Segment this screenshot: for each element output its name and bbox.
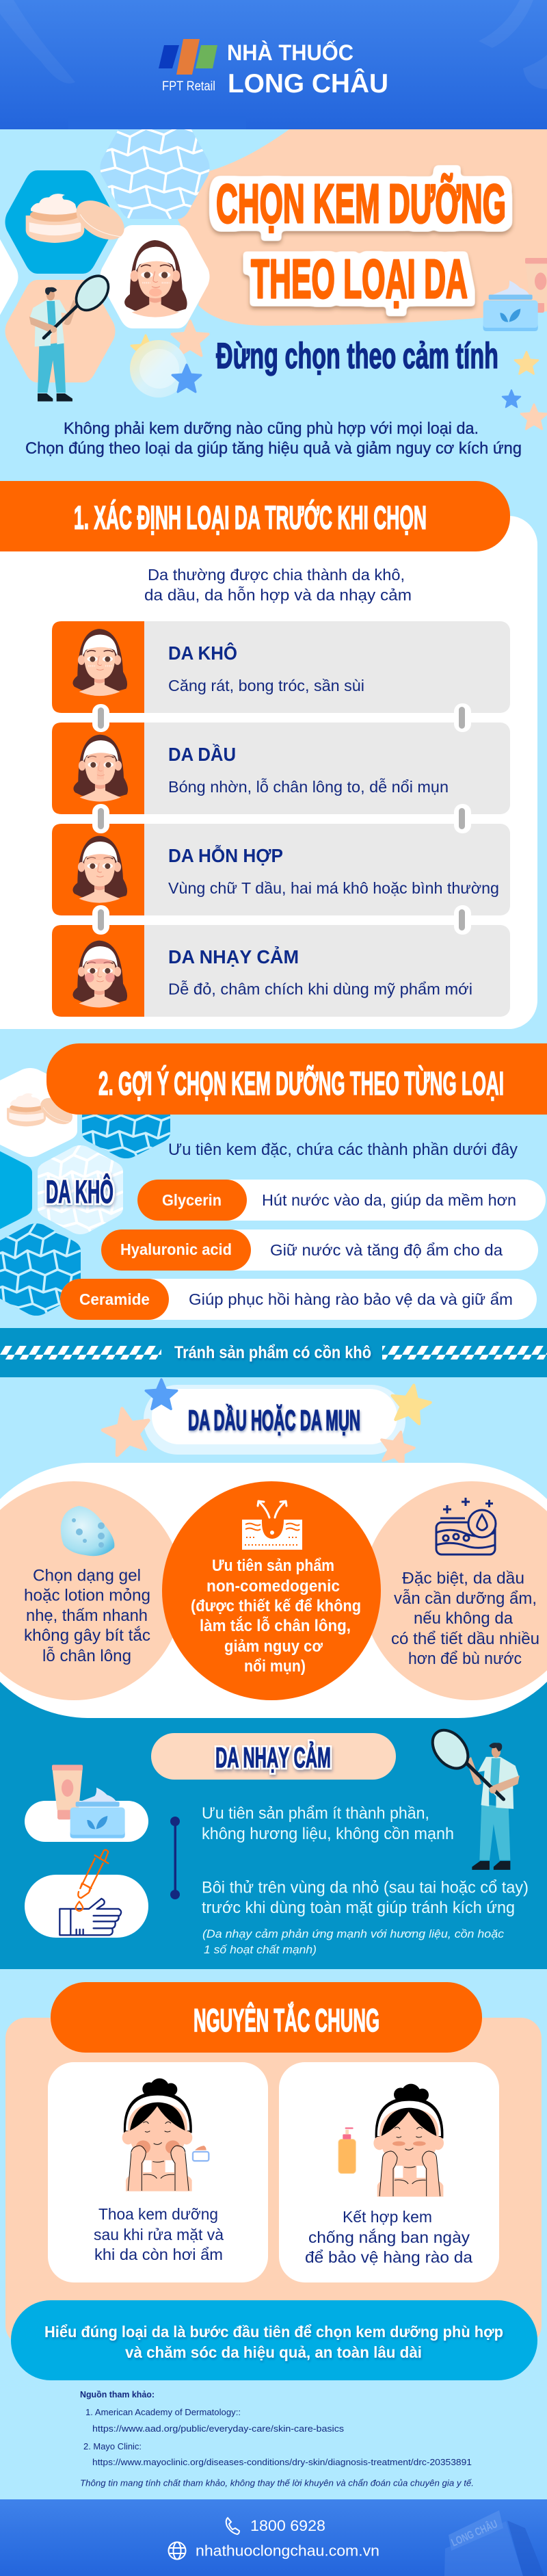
warning band	[0, 1328, 547, 1377]
circle: left tip	[0, 1481, 183, 1700]
circle: right tip	[362, 1481, 547, 1700]
icon: cream jar	[26, 192, 131, 248]
panel: general principles	[5, 1982, 542, 2380]
section 1 intro	[144, 566, 412, 603]
title	[216, 173, 506, 309]
card: da nhạy cảm	[52, 925, 510, 1017]
white stadium	[0, 1463, 547, 1718]
italic note: (Da nhạy cảm phản ứng mạnh với hương liệu, cồn hoặc	[202, 1927, 505, 1940]
references: Nguồn tham khảo:	[80, 2389, 155, 2399]
conclusion pill: Hiểu đúng loại da là bước đầu tiên để chọn kem dưỡng phù hợp	[44, 2323, 503, 2341]
timeline	[170, 1817, 180, 1899]
label: da khô: DA KHÔ	[46, 1173, 114, 1210]
sensitive skin text	[202, 1804, 529, 1917]
sensitive skin text: không hương liệu, không cồn mạnh	[202, 1825, 454, 1843]
card: moisturize	[48, 2062, 268, 2282]
icon: phone	[226, 2518, 239, 2534]
panel: oily or acne skin	[0, 1379, 547, 1969]
icon: FPT logo	[159, 39, 217, 75]
peach background panel	[5, 2018, 542, 2346]
store watermark	[444, 2510, 544, 2576]
heading pill: da dầu	[99, 1379, 433, 1467]
left tip text: Chọn dạng gel	[33, 1567, 141, 1585]
center text: Ưu tiên sản phẩm	[212, 1557, 334, 1575]
card: da hỗn hợp: DA HỖN HỢP	[168, 845, 283, 866]
card: da nhạy cảm: Dễ đỏ, châm chích khi dùng mỹ phẩm mới	[168, 980, 472, 998]
card: da dầu	[52, 723, 510, 814]
card: moisturize: khi da còn hơi ẩm	[94, 2246, 223, 2263]
footer	[0, 2499, 547, 2576]
row: hyaluronic acid: Giữ nước và tăng độ ẩm cho da	[270, 1241, 503, 1259]
center text: nổi mụn)	[244, 1657, 306, 1676]
right tip text: nếu không da	[414, 1609, 513, 1628]
hexagon cluster	[0, 1068, 170, 1317]
section 1 intro: da dầu, da hỗn hợp và da nhạy cảm	[144, 586, 412, 603]
card: sunscreen: Kết hợp kem	[343, 2208, 432, 2226]
icon: gel drop	[61, 1506, 114, 1556]
hexagon: white left edge	[0, 226, 18, 328]
panel: sensitive skin	[25, 1723, 529, 1956]
icon: globe	[168, 2542, 186, 2559]
row: ceramide: Giúp phục hồi hàng rào bảo vệ da và giữ ẩm	[189, 1290, 513, 1308]
card: moisturize: Thoa kem dưỡng	[98, 2205, 218, 2223]
center text: giảm nguy cơ	[224, 1637, 323, 1656]
right tip text: Đặc biệt, da dầu	[402, 1570, 524, 1587]
illustration: woman applying cream	[122, 2079, 209, 2191]
references: 1. American Academy of Dermatology::	[85, 2407, 241, 2417]
logo text: FPT Retail	[162, 79, 215, 94]
circle: center highlight	[162, 1481, 381, 1700]
card: da khô	[52, 621, 510, 713]
icon: tube	[525, 258, 547, 313]
sensitive skin text: Bôi thử trên vùng da nhỏ (sau tai hoặc cổ tay)	[202, 1879, 529, 1897]
sensitive skin text: Ưu tiên sản phẩm ít thành phần,	[202, 1804, 429, 1823]
conclusion pill: và chăm sóc da hiệu quả, an toàn lâu dài	[125, 2343, 422, 2361]
left tip text: nhẹ, thấm nhanh	[26, 1606, 148, 1625]
conclusion pill	[11, 2300, 537, 2380]
references: Thông tin mang tính chất tham khảo, không thay thế lời khuyên và chẩn đoán của chuyên gia y tế.	[80, 2478, 474, 2488]
references: https://www.mayoclinic.org/diseases-conditions/dry-skin/diagnosis-treatment/drc-20353891	[92, 2457, 472, 2467]
icon: skin with water drop	[436, 1498, 496, 1554]
row: hyaluronic acid: Hyaluronic acid	[120, 1240, 232, 1258]
right tip text: hơn để bù nước	[408, 1650, 522, 1668]
hero panel	[0, 116, 547, 458]
references: 2. Mayo Clinic:	[83, 2441, 142, 2451]
icon: sunscreen bottle	[338, 2127, 356, 2174]
heading bar 3	[51, 1982, 482, 2053]
heading bar 3: NGUYÊN TẮC CHUNG	[194, 2002, 379, 2038]
card: da dầu: Bóng nhờn, lỗ chân lông to, dễ nổi mụn	[168, 778, 449, 796]
heading pill: da nhạy cảm	[151, 1733, 396, 1780]
card: da khô: DA KHÔ	[168, 642, 237, 664]
pill: patch test	[25, 1850, 148, 1938]
left tip text: không gây bít tắc	[24, 1626, 150, 1645]
top cover for hexagon overflow	[68, 116, 246, 129]
card: sunscreen: chống nắng ban ngày	[308, 2228, 470, 2246]
panel: section 1 skin types	[0, 481, 537, 1029]
row: hyaluronic acid	[101, 1230, 538, 1271]
illustration: woman with sunscreen	[373, 2084, 444, 2197]
row: glycerin: Glycerin	[162, 1191, 222, 1209]
left tip text: hoặc lotion mỏng	[24, 1586, 150, 1605]
left tip text	[24, 1567, 150, 1665]
center text: làm tắc lỗ chân lông,	[200, 1616, 351, 1635]
heading pill: da dầu: DA DẦU HOẶC DA MỤN	[188, 1404, 360, 1436]
phone number: 1800 6928	[250, 2517, 325, 2534]
hexagon: crack pattern	[100, 129, 209, 219]
italic note	[202, 1927, 505, 1956]
logo text	[162, 40, 388, 99]
row: ceramide: Ceramide	[79, 1290, 150, 1308]
card: da khô: Căng rát, bong tróc, sần sùi	[168, 677, 364, 694]
illustration: person	[425, 1723, 520, 1870]
left tip text: lỗ chân lông	[42, 1647, 131, 1665]
row: ceramide	[60, 1279, 537, 1320]
row: glycerin	[137, 1180, 546, 1221]
section 1 intro: Da thường được chia thành da khô,	[148, 566, 405, 584]
sensitive skin text: trước khi dùng toàn mặt giúp tránh kích ứng	[202, 1899, 515, 1917]
intro text: Chọn đúng theo loại da giúp tăng hiệu quả và giảm nguy cơ kích ứng	[25, 439, 522, 458]
right tip text: có thể tiết dầu nhiều	[391, 1630, 539, 1648]
icon: blue jar	[483, 281, 538, 331]
references: https://www.aad.org/public/everyday-care/skin-care-basics	[92, 2423, 345, 2434]
intro text	[25, 419, 522, 458]
store watermark: LONG CHÂU	[449, 2517, 499, 2549]
card: da dầu: DA DẦU	[168, 744, 236, 765]
card: da nhạy cảm: DA NHẠY CẢM	[168, 946, 299, 967]
center text: (được thiết kế để không	[191, 1597, 361, 1615]
card: sunscreen	[279, 2062, 499, 2282]
glow circle and stars	[130, 321, 547, 429]
section 2 intro: Ưu tiên kem đặc, chứa các thành phần dưới đây	[168, 1141, 518, 1159]
heading pill: da nhạy cảm: DA NHẠY CẢM	[215, 1741, 331, 1773]
heading bar 1	[0, 481, 510, 551]
heading bar 2	[46, 1043, 547, 1115]
icon: cream jar small	[7, 1093, 77, 1130]
hexagon: blue jar background	[5, 170, 116, 274]
website: nhathuoclongchau.com.vn	[196, 2542, 379, 2559]
logo text: NHÀ THUỐC	[227, 40, 353, 65]
illustration: person with magnifier	[29, 270, 115, 402]
illustration: woman face	[124, 240, 187, 317]
hexagon: white face	[100, 225, 210, 328]
icon: pore	[242, 1501, 302, 1550]
row: glycerin: Hút nước vào da, giúp da mềm hơn	[262, 1191, 516, 1209]
intro text: Không phải kem dưỡng nào cũng phù hợp với mọi loại da.	[64, 419, 479, 438]
pill: products	[25, 1765, 148, 1842]
card: moisturize: sau khi rửa mặt và	[94, 2226, 224, 2243]
logo text: LONG CHÂU	[228, 68, 388, 99]
right tip text: vẫn cần dưỡng ẩm,	[394, 1589, 537, 1608]
stars	[99, 1379, 433, 1467]
references	[80, 2389, 474, 2488]
peach blob behind title	[178, 129, 547, 326]
hexagon: peach	[5, 280, 116, 382]
center text	[191, 1557, 361, 1676]
center text: non-comedogenic	[206, 1577, 340, 1596]
right tip text	[391, 1570, 539, 1668]
italic note: 1 số hoạt chất mạnh)	[204, 1943, 317, 1956]
warning band: Tránh sản phẩm có cồn khô	[174, 1343, 371, 1362]
card connectors	[92, 703, 471, 935]
panel: section 2 dry skin	[0, 1043, 547, 1377]
card: da hỗn hợp	[52, 824, 510, 915]
header band with logo	[0, 0, 547, 129]
card: sunscreen: để bảo vệ hàng rào da	[305, 2248, 472, 2266]
dark lower background	[0, 1590, 547, 1969]
card: da hỗn hợp: Vùng chữ T dầu, hai má khô hoặc bình thường	[168, 879, 499, 897]
